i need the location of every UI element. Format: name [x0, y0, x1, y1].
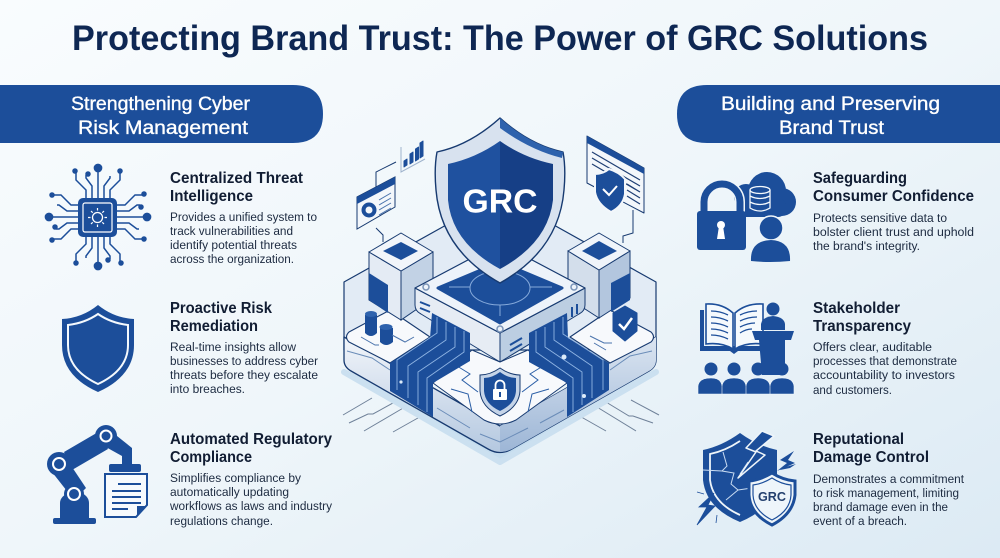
title: Protecting Brand Trust: The Power of GRC Solutions — [72, 19, 928, 58]
text block: Centralized Threat Intelligence — [170, 170, 317, 266]
text block: Reputational Damage Control: Demonstrates a commitment — [813, 472, 965, 486]
text block: Automated Regulatory Compliance: regulations change. — [170, 514, 273, 528]
platform shadow — [344, 372, 656, 462]
icon: lock, cloud database and person — [697, 172, 796, 262]
text block: Proactive Risk Remediation: Remediation — [170, 318, 258, 335]
text block: Stakeholder Transparency: Stakeholder — [813, 300, 900, 317]
text block: Automated Regulatory Compliance: workflows as laws and industry — [169, 499, 333, 513]
front tile — [433, 350, 567, 424]
text block: Proactive Risk Remediation: businesses to address cyber — [170, 354, 318, 368]
text block: Stakeholder Transparency: processes that demonstrate — [813, 354, 957, 368]
icon: circuit chip — [45, 164, 151, 270]
text block: Stakeholder Transparency: and customers. — [813, 383, 892, 397]
main GRC shield: GRC — [462, 184, 538, 220]
text block: Stakeholder Transparency: Transparency — [813, 318, 911, 335]
panel heading: Strengthening Cyber Risk Management: Strengthening Cyber — [71, 94, 251, 115]
icon: cracked shield with lightning and GRC badge — [697, 431, 796, 525]
text block: Reputational Damage Control — [813, 431, 965, 528]
icon: robotic arm with document — [47, 425, 147, 524]
text block: Reputational Damage Control: Reputational — [813, 431, 904, 448]
panel heading: Strengthening Cyber Risk Management — [0, 85, 323, 143]
text block: Automated Regulatory Compliance: Compliance — [170, 449, 252, 466]
text block: Safeguarding Consumer Confidence: bolster client trust and uphold — [813, 225, 974, 239]
text block: Stakeholder Transparency: accountability to investors — [813, 368, 955, 382]
upper layer — [344, 195, 656, 350]
icon: open book, presenter and audience — [698, 302, 794, 394]
right circuit band — [529, 313, 609, 417]
text block: Proactive Risk Remediation: Proactive Risk — [170, 300, 272, 317]
right shield check — [613, 306, 637, 341]
text block: Automated Regulatory Compliance — [169, 431, 333, 528]
central block — [415, 243, 585, 362]
floating shield check card — [587, 136, 644, 243]
text block: Centralized Threat Intelligence: Centralized Threat — [170, 170, 304, 187]
text block: Automated Regulatory Compliance: automatically updating — [170, 485, 289, 499]
icon: shield — [62, 305, 134, 392]
left tower — [369, 233, 433, 320]
text block: Safeguarding Consumer Confidence: Consumer Confidence — [813, 188, 974, 205]
panel heading: Building and Preserving Brand Trust — [677, 85, 1000, 143]
text block: Proactive Risk Remediation: into breaches. — [170, 382, 245, 396]
text block: Safeguarding Consumer Confidence — [813, 170, 974, 253]
text block: Automated Regulatory Compliance: Automated Regulatory — [170, 431, 332, 448]
floating settings card — [357, 162, 396, 242]
text block: Automated Regulatory Compliance: Simplifies compliance by — [170, 471, 302, 485]
text block: Safeguarding Consumer Confidence: Safeguarding — [813, 170, 907, 187]
main GRC shield — [435, 118, 565, 283]
text block: Reputational Damage Control: to risk management, limiting — [813, 486, 959, 500]
text block: Reputational Damage Control: event of a breach. — [813, 514, 907, 528]
text block: Stakeholder Transparency: Offers clear, auditable — [813, 340, 932, 354]
central isometric GRC platform — [343, 118, 659, 462]
data cylinders — [365, 311, 393, 345]
text block: Proactive Risk Remediation: Real-time insights allow — [170, 340, 296, 354]
text block: Proactive Risk Remediation — [170, 300, 318, 396]
circuit lines under the platform — [343, 398, 659, 432]
text block: Safeguarding Consumer Confidence: the brand's integrity. — [813, 239, 920, 253]
floating bar chart — [401, 141, 425, 172]
text block: Safeguarding Consumer Confidence: Protects sensitive data to — [813, 211, 947, 225]
text block: Stakeholder Transparency — [813, 300, 957, 397]
icon: cracked shield with lightning and GRC badge: GRC — [758, 490, 786, 504]
panel heading: Building and Preserving Brand Trust: Brand Trust — [779, 118, 885, 139]
right tower — [568, 233, 630, 318]
left circuit band — [390, 313, 470, 417]
panel heading: Strengthening Cyber Risk Management: Risk Management — [78, 118, 249, 139]
text block: Centralized Threat Intelligence: Provides a unified system to — [170, 210, 317, 224]
text block: Centralized Threat Intelligence: across the organization. — [170, 252, 294, 266]
lock shield — [480, 368, 520, 416]
lower slab — [344, 310, 656, 452]
text block: Reputational Damage Control: brand damage even in the — [813, 500, 948, 514]
text block: Centralized Threat Intelligence: track vulnerabilities and — [170, 224, 293, 238]
text block: Proactive Risk Remediation: threats before they escalate — [170, 368, 318, 382]
text block: Centralized Threat Intelligence: Intelligence — [170, 188, 253, 205]
text block: Centralized Threat Intelligence: identify potential threats — [170, 238, 297, 252]
panel heading: Building and Preserving Brand Trust: Building and Preserving — [721, 94, 940, 115]
text block: Reputational Damage Control: Damage Control — [813, 449, 929, 466]
